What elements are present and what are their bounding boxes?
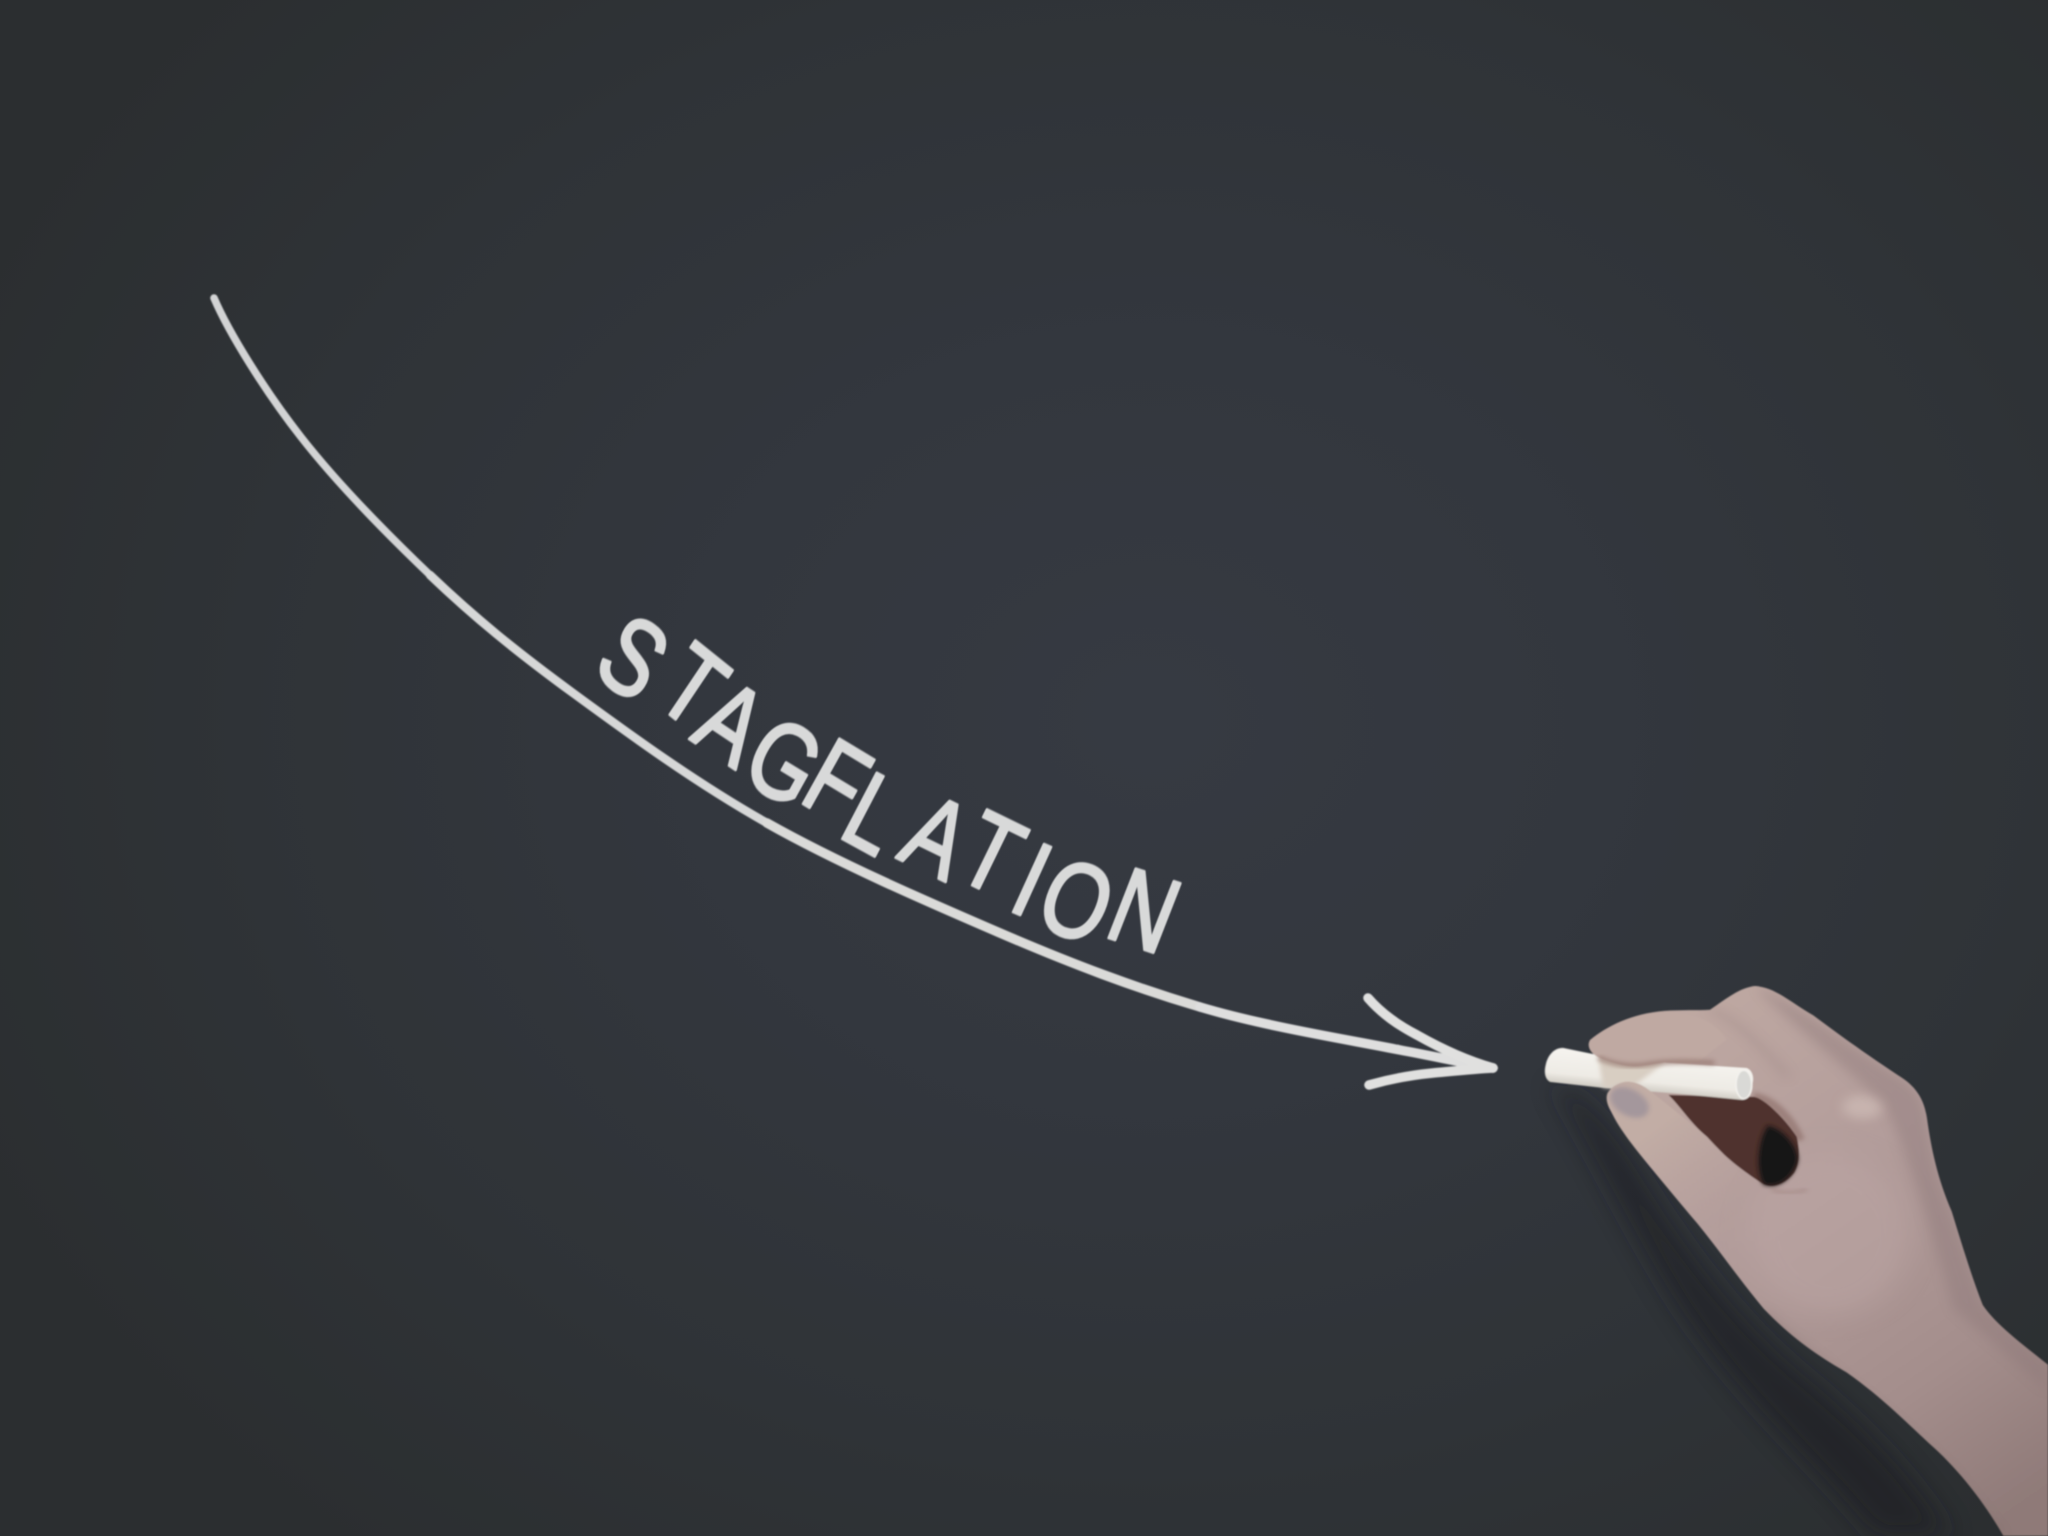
chalk arrow: descending curve with arrowhead: [214, 298, 1493, 1085]
gap between thumb and fingers: [1669, 1095, 1799, 1186]
index fingertip over chalk: [1589, 1012, 1727, 1067]
chalk stick: [1545, 1048, 1753, 1100]
illustration: chalkboard scene: [209, 293, 2048, 1536]
thumb and thumbnail: [1604, 1081, 1753, 1234]
hand shadow on board: [1553, 1083, 1950, 1536]
hand shading: [1752, 994, 2018, 1351]
chalk handwriting: STAGFLATION: STAGFLATION: [560, 583, 1207, 1010]
hand holding chalk: [1545, 986, 2048, 1536]
hand silhouette: [1589, 986, 2048, 1536]
